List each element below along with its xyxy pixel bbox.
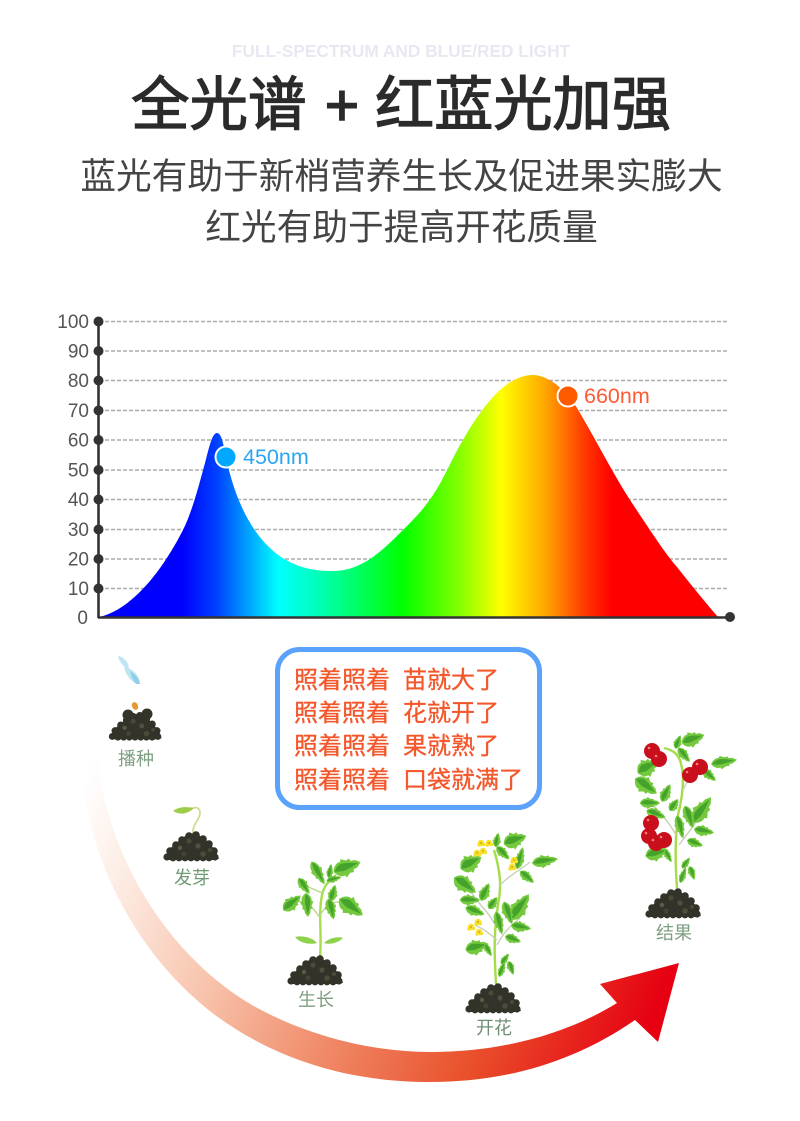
stage: sowing [109,656,162,769]
title [131,71,671,138]
axis labels: 90 [68,342,89,362]
axis labels: 20 [68,550,89,570]
callout box: 苗就大了 [403,667,499,694]
callout box: 口袋就满了 [403,767,523,794]
label: 生长 [298,990,334,1010]
icon: seed [131,701,139,711]
title: + [325,73,359,138]
axes [98,321,730,618]
marker: 660nm: 660nm [584,384,650,408]
axis labels: 0 [77,608,88,629]
icon: soil [465,983,521,1013]
grid lines [105,322,728,588]
icon: water drops [118,656,140,684]
label: 发芽 [174,868,210,888]
marker: 450nm: 450nm [243,445,309,469]
callout box: 照着照着 [294,700,390,727]
growth arrow [80,755,679,1082]
subtitle text block: 红光有助于提高开花质量 [205,208,598,248]
stage: sprouting [163,807,219,888]
english subtitle: FULL-SPECTRUM AND BLUE/RED LIGHT [232,41,571,61]
axis labels: 60 [68,430,89,452]
axis labels: 40 [68,490,89,511]
subtitle text block [80,156,723,248]
icon: seedling plant [278,853,368,958]
callout box: 照着照着 [294,767,390,794]
title: 红蓝光加强 [375,71,671,138]
label: 开花 [476,1018,512,1038]
callout box: 照着照着 [294,667,390,694]
label: 结果 [656,923,692,943]
label: 播种 [118,749,154,769]
spectrum chart [57,312,735,629]
title: 全光谱 [131,73,307,138]
axis labels: 30 [68,520,89,541]
axis labels: 70 [68,401,89,422]
stage: growth [278,853,368,1010]
icon: sprout [173,807,200,834]
callout box [278,650,540,808]
axis labels: 100 [57,312,89,333]
callout box: 花就开了 [403,700,499,727]
axis labels: 50 [68,460,89,482]
axis labels [57,312,89,629]
icon: soil [163,831,219,861]
stage: flowering [449,827,559,1038]
subtitle text block: 蓝光有助于新梢营养生长及促进果实膨大 [80,156,723,196]
icon: soil [645,888,701,918]
spectrum curve [99,375,718,617]
callout box: 照着照着 [294,733,390,760]
axis labels: 80 [68,371,89,392]
axis dots [94,316,735,622]
axis labels: 10 [68,579,89,600]
icon: soil [109,708,162,741]
icon: fruiting plant [630,727,738,888]
icon: soil [287,955,343,985]
stage: fruiting [630,727,738,943]
icon: flowering plant [449,827,559,984]
callout box: 果就熟了 [403,733,499,760]
